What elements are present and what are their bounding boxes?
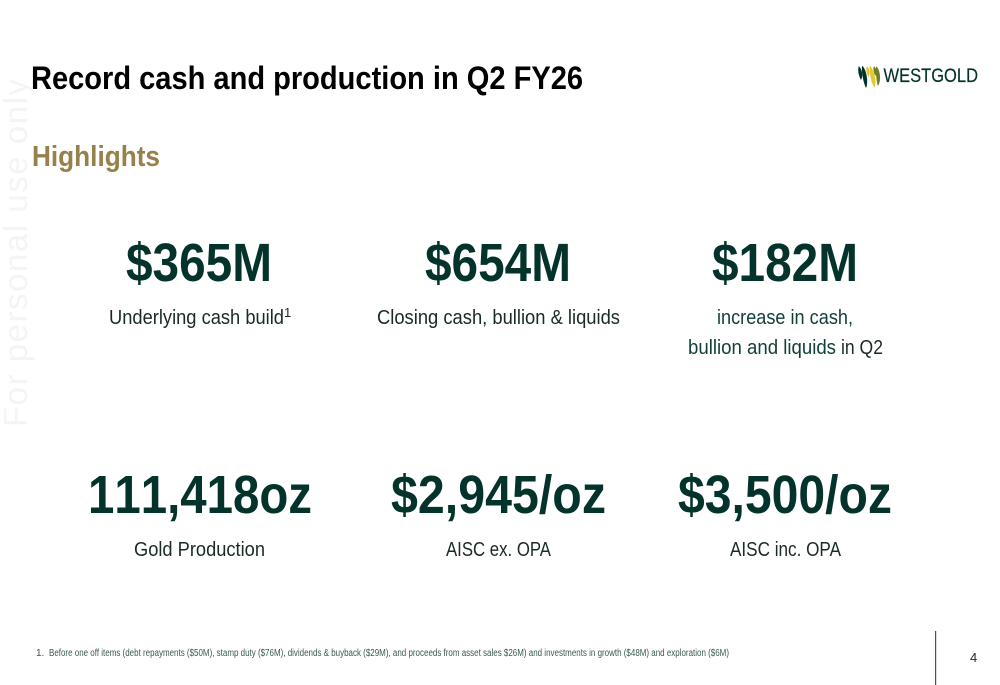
stat: AISC inc OPA	[678, 465, 892, 561]
stat: gold production: 111,418oz	[88, 465, 312, 525]
stat: closing cash: $654M	[425, 233, 571, 293]
icon: logo strokes	[859, 66, 880, 87]
stat: increase in cash: increase in cash,	[717, 306, 853, 329]
stat: increase in cash	[688, 233, 883, 359]
stat: gold production	[88, 465, 312, 561]
stat: AISC inc OPA: AISC inc. OPA	[730, 538, 841, 561]
page number: 4	[970, 650, 977, 665]
stat: underlying cash build	[109, 233, 291, 329]
footnote: Before one off items (debt repayments ($50M), stamp duty ($76M), dividends & buyback ($29M), and proceeds from asset sales $26M) and investments in growth ($48M) and exploration ($6M)	[49, 648, 729, 659]
title: Record cash and production in Q2 FY26	[31, 60, 583, 96]
stat: AISC inc OPA: $3,500/oz	[678, 465, 892, 525]
footnote: 1.	[36, 648, 44, 659]
divider	[935, 631, 936, 685]
heading: highlights: Highlights	[32, 141, 160, 173]
logo: Westgold	[859, 65, 978, 87]
stat: closing cash: Closing cash, bullion & liquids	[377, 306, 620, 329]
stat: AISC ex OPA: AISC ex. OPA	[446, 538, 551, 561]
stat: increase in cash: in Q2	[841, 336, 883, 359]
stat: AISC ex OPA: $2,945/oz	[391, 465, 606, 525]
stat: gold production: Gold Production	[134, 538, 265, 561]
stat: increase in cash: $182M	[712, 233, 858, 293]
stat: increase in cash: bullion and liquids	[688, 336, 836, 359]
stat: underlying cash build: 1	[284, 305, 291, 320]
logo wordmark: WESTGOLD	[884, 65, 978, 87]
stat: underlying cash build: Underlying cash build	[109, 306, 284, 329]
stat: underlying cash build: $365M	[126, 233, 272, 293]
stat: closing cash	[377, 233, 620, 329]
stat: AISC ex OPA	[391, 465, 606, 561]
